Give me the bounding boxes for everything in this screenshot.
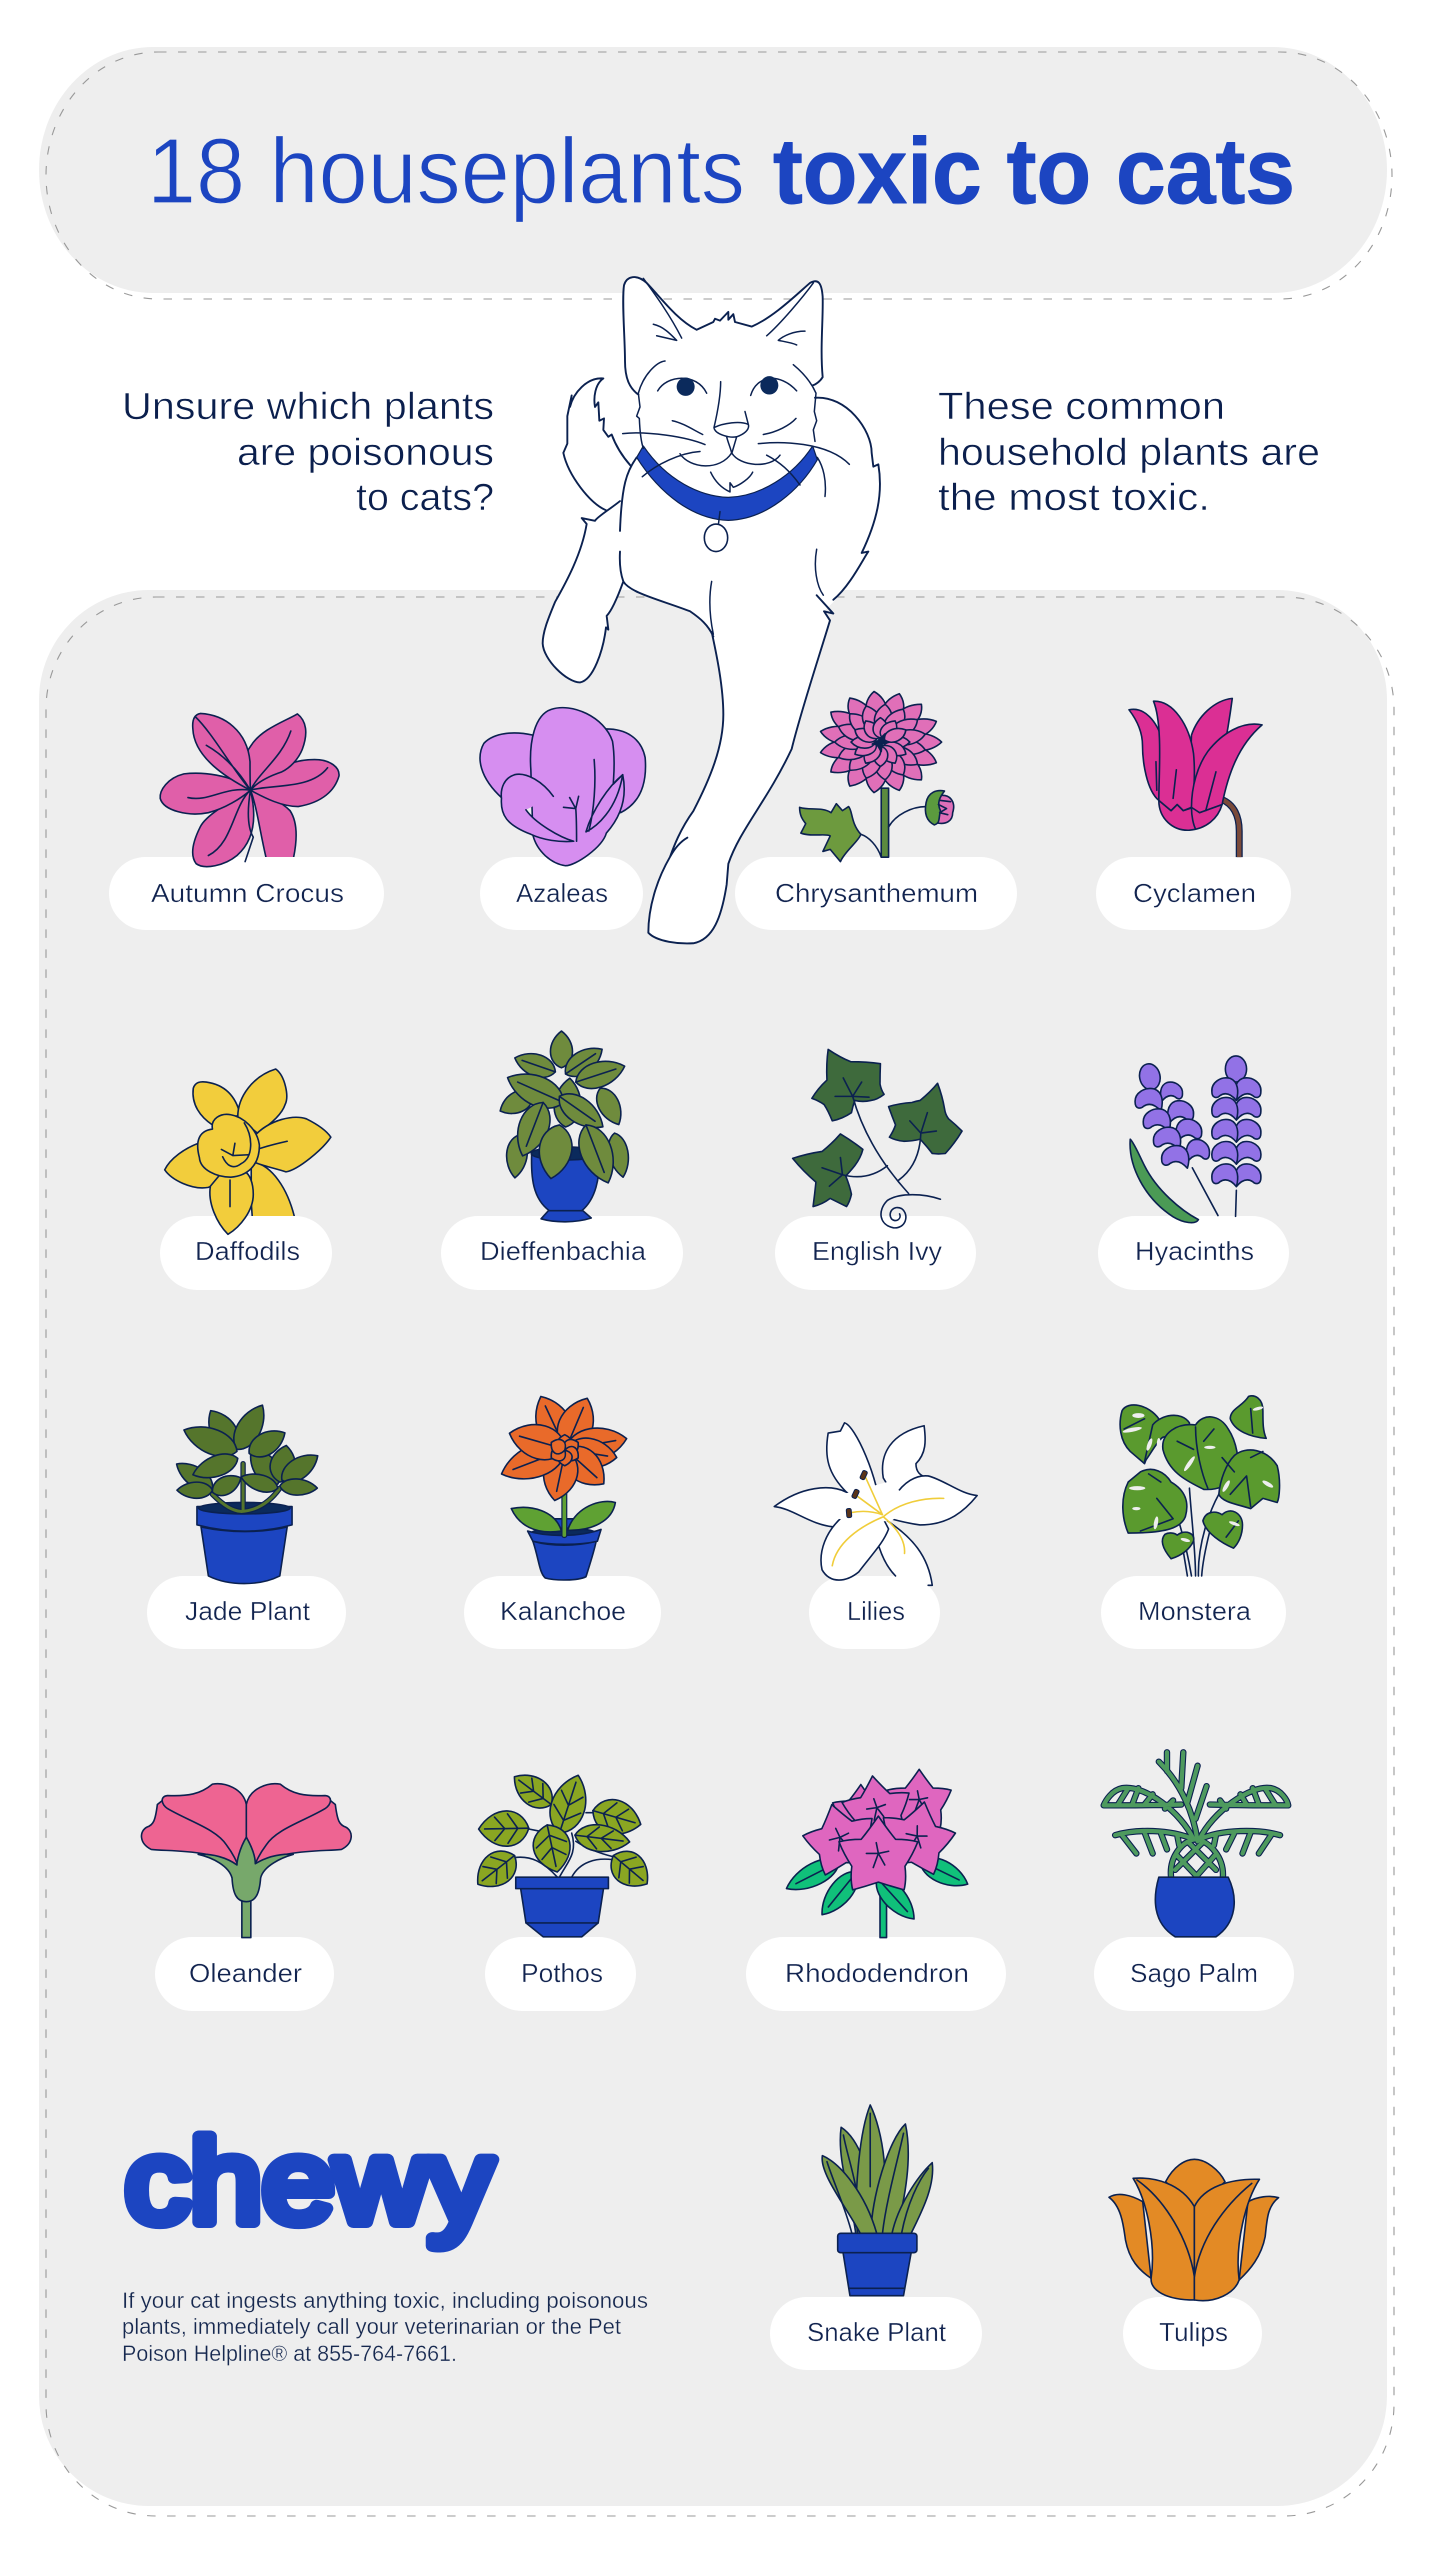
cat collar tag <box>704 524 728 552</box>
intro text right: the most toxic. <box>938 477 1210 519</box>
intro text right: These common <box>938 386 1225 428</box>
title: 18 houseplants <box>147 119 745 223</box>
icon: daffodil petals and trumpet <box>165 1069 331 1234</box>
cat outline <box>543 277 880 943</box>
title <box>147 119 1295 223</box>
label: Daffodils <box>160 1216 332 1290</box>
icon: cyclamen flower <box>1129 698 1262 857</box>
icon: snake plant in pot <box>822 2105 933 2296</box>
icon: sago palm in pot <box>1104 1752 1288 1937</box>
label: Kalanchoe <box>464 1576 661 1649</box>
icon: english ivy <box>793 1049 962 1228</box>
label: Sago Palm <box>1094 1937 1294 2011</box>
text block: helpline note <box>122 2288 648 2366</box>
label: Lilies <box>809 1576 940 1649</box>
intro text left: to cats? <box>356 477 494 519</box>
intro text left: are poisonous <box>237 432 494 474</box>
plant: Snake Plant <box>770 2105 982 2370</box>
plant: English Ivy <box>775 1049 976 1290</box>
plant: Autumn Crocus <box>109 713 384 930</box>
label: Chrysanthemum: Chrysanthemum <box>775 878 978 908</box>
plant: Tulips <box>1109 2159 1279 2370</box>
label: English Ivy: English Ivy <box>812 1236 942 1266</box>
icon: azalea flower <box>480 708 646 866</box>
plant: Daffodils <box>160 1069 332 1290</box>
plant: Rhododendron <box>746 1769 1006 2011</box>
text block: helpline note: If your cat ingests anything toxic, including poisonous <box>122 2288 648 2313</box>
plant: Cyclamen <box>1096 698 1291 930</box>
illustration: white cat with blue collar <box>543 277 880 943</box>
label: Kalanchoe: Kalanchoe <box>500 1596 626 1626</box>
panel: title banner <box>39 47 1392 299</box>
icon: oleander flower <box>141 1784 351 1938</box>
label: Snake Plant <box>770 2297 982 2370</box>
logo: chewy: chewy <box>125 2116 493 2248</box>
label: Hyacinths: Hyacinths <box>1135 1236 1254 1266</box>
label: Jade Plant: Jade Plant <box>185 1596 311 1626</box>
label: Lilies: Lilies <box>847 1596 905 1626</box>
icon: pothos in pot <box>468 1766 657 1937</box>
plant: Pothos <box>468 1766 657 2011</box>
plant: Kalanchoe <box>464 1389 661 1649</box>
label: Tulips <box>1123 2297 1262 2370</box>
plant: Lilies <box>774 1423 977 1649</box>
label: Cyclamen: Cyclamen <box>1133 878 1256 908</box>
label: Tulips: Tulips <box>1159 2317 1228 2347</box>
label: Rhododendron: Rhododendron <box>785 1958 969 1988</box>
icon: kalanchoe in pot <box>496 1389 629 1580</box>
intro text left: Unsure which plants <box>122 386 494 428</box>
icon: jade plant in pot <box>171 1399 323 1584</box>
label: Snake Plant: Snake Plant <box>807 2317 947 2347</box>
icon: monstera plant <box>1120 1396 1280 1576</box>
cat face and details <box>623 278 849 634</box>
label: Daffodils: Daffodils <box>195 1236 300 1266</box>
label: Pothos: Pothos <box>521 1958 603 1988</box>
plant: Monstera <box>1101 1396 1286 1649</box>
label: Oleander <box>155 1937 334 2011</box>
label: Monstera <box>1101 1576 1286 1649</box>
label: Chrysanthemum <box>735 857 1017 930</box>
label: Autumn Crocus: Autumn Crocus <box>151 878 344 908</box>
icon: rhododendron flower cluster <box>781 1769 973 1938</box>
icon: lily flower <box>774 1423 977 1585</box>
icon: chrysanthemum flower <box>800 691 954 862</box>
cat eyes <box>677 376 778 396</box>
title: toxic to cats <box>773 119 1295 223</box>
icon: hyacinths <box>1130 1056 1261 1223</box>
label: Azaleas: Azaleas <box>516 878 608 908</box>
label: Autumn Crocus <box>109 857 384 930</box>
label: Monstera: Monstera <box>1138 1596 1252 1626</box>
intro text right: household plants are <box>938 432 1320 474</box>
label: Pothos <box>485 1937 636 2011</box>
cat silhouette fill <box>543 277 880 943</box>
text block: helpline note: plants, immediately call your veterinarian or the Pet <box>122 2314 621 2339</box>
icon: tulip flower <box>1109 2159 1279 2301</box>
label: Sago Palm: Sago Palm <box>1130 1958 1258 1988</box>
plant: Dieffenbachia <box>441 1031 683 1290</box>
icon: autumn crocus petals <box>160 713 339 867</box>
label: Dieffenbachia: Dieffenbachia <box>480 1236 647 1266</box>
icon: autumn crocus flower (rear petal) <box>252 792 297 857</box>
label: Hyacinths <box>1098 1216 1289 1290</box>
label: Azaleas <box>480 857 643 930</box>
intro text left <box>122 386 494 519</box>
icon: daffodil rear petal <box>250 1164 295 1216</box>
label: Jade Plant <box>147 1576 346 1649</box>
plant: Jade Plant <box>147 1399 346 1649</box>
cat collar <box>637 446 817 520</box>
text block: helpline note: Poison Helpline® at 855-764-7661. <box>122 2341 457 2366</box>
label: English Ivy <box>775 1216 976 1290</box>
label: Dieffenbachia <box>441 1216 683 1290</box>
plant: Hyacinths <box>1098 1056 1289 1290</box>
plant: Azaleas <box>480 708 646 930</box>
plant: Oleander <box>141 1784 351 2011</box>
label: Oleander: Oleander <box>189 1958 302 1988</box>
icon: dieffenbachia in pot <box>495 1031 632 1222</box>
intro text right <box>938 386 1320 519</box>
plant: Sago Palm <box>1094 1752 1294 2011</box>
label: Cyclamen <box>1096 857 1291 930</box>
label: Rhododendron <box>746 1937 1006 2011</box>
plant: Chrysanthemum <box>735 691 1017 930</box>
panel: plants background <box>39 590 1394 2516</box>
